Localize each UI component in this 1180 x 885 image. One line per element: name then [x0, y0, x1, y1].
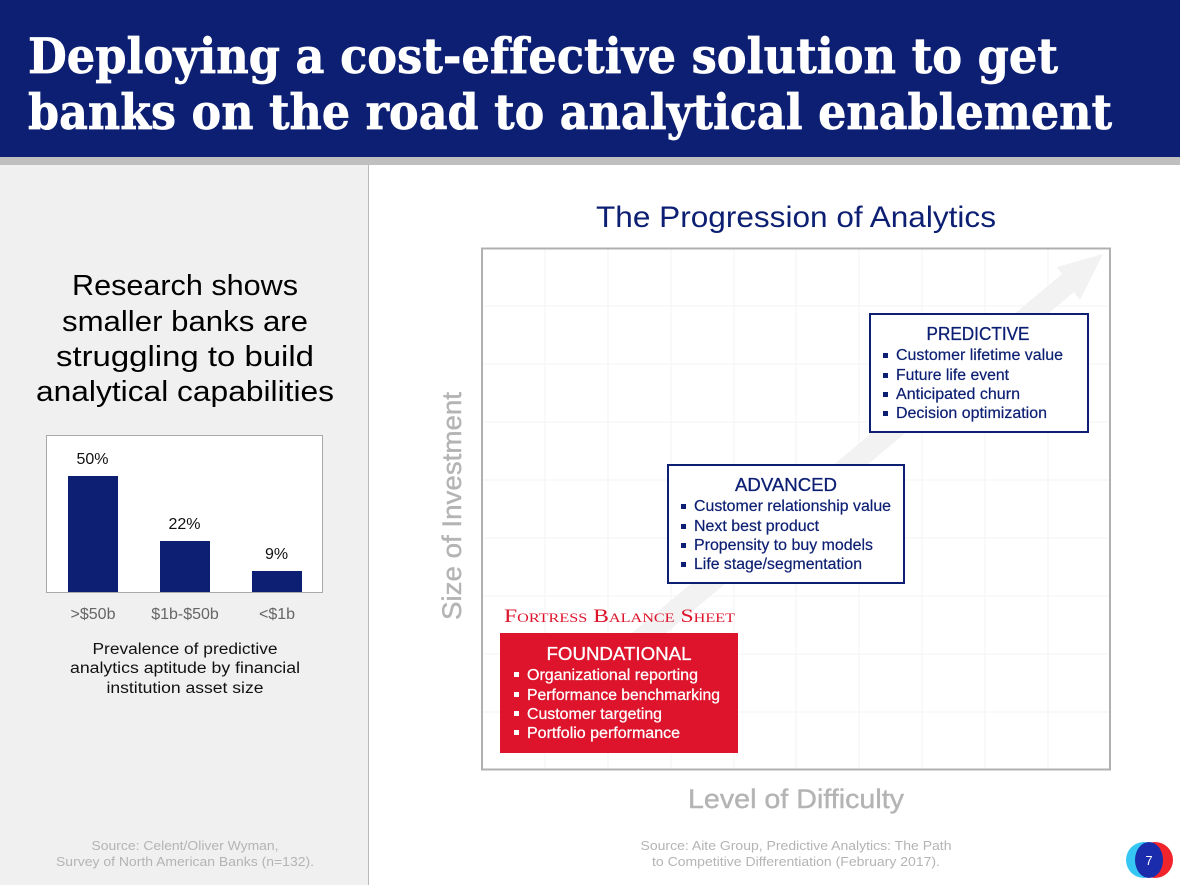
source: Celent: Survey of North American Banks (n=132).	[56, 855, 314, 869]
bar: <$1b 9%	[252, 546, 302, 623]
bar: >$50b 50%: >$50b	[71, 606, 116, 623]
source: Aite Group	[640, 839, 952, 869]
header banner	[0, 0, 1180, 165]
box: predictive: Future life event	[896, 367, 1010, 384]
label: fortress balance sheet: Fortress Balance Sheet	[504, 606, 735, 627]
box: foundational: Organizational reporting	[527, 667, 698, 684]
bar: $1b-$50b 22%	[151, 516, 219, 623]
bar: $1b-$50b 22%: 22%	[168, 516, 201, 533]
box: foundational: Portfolio performance	[527, 725, 680, 742]
chart caption: Prevalence of predictive	[92, 641, 278, 658]
source: Celent	[56, 839, 314, 869]
panel: research	[0, 165, 369, 885]
box: predictive: Anticipated churn	[896, 386, 1020, 403]
page number badge	[1126, 842, 1173, 878]
source: Celent: Source: Celent/Oliver Wyman,	[92, 839, 278, 853]
bar: >$50b 50%	[68, 451, 118, 623]
x axis label: Level of Difficulty	[688, 784, 905, 814]
box: foundational	[500, 633, 738, 753]
box: advanced: Life stage/segmentation	[694, 556, 862, 573]
chart caption	[70, 641, 300, 697]
research heading: analytical capabilities	[36, 376, 334, 408]
bar: <$1b 9%: <$1b	[259, 606, 295, 623]
bar: >$50b 50%: 50%	[76, 451, 109, 468]
research heading	[36, 270, 334, 408]
box: predictive: PREDICTIVE	[926, 324, 1030, 344]
box: foundational: FOUNDATIONAL	[546, 644, 692, 664]
box: predictive: Customer lifetime value	[896, 347, 1063, 364]
page number badge: 7	[1145, 853, 1153, 868]
box: predictive: Decision optimization	[896, 405, 1047, 422]
chart heading: The Progression of Analytics	[596, 201, 996, 234]
title	[28, 27, 1112, 141]
box: foundational: Customer targeting	[527, 706, 662, 723]
research heading: smaller banks are	[62, 306, 308, 338]
bar: <$1b 9%: 9%	[265, 546, 288, 563]
bar: $1b-$50b 22%: $1b-$50b	[151, 606, 219, 623]
box: advanced: Next best product	[694, 518, 820, 535]
research heading: Research shows	[72, 270, 298, 302]
title: Deploying a cost-effective solution to get	[28, 27, 1058, 85]
panel: progression matrix	[482, 248, 1110, 770]
arrow	[626, 254, 1103, 655]
box: predictive	[870, 314, 1088, 432]
chart caption: analytics aptitude by financial	[70, 660, 300, 677]
box: advanced: Customer relationship value	[694, 498, 891, 515]
box: advanced: Propensity to buy models	[694, 537, 873, 554]
source: Aite Group: Source: Aite Group, Predictive Analytics: The Path	[640, 839, 952, 853]
bar chart	[46, 436, 322, 623]
box: advanced: ADVANCED	[735, 475, 837, 495]
chart caption: institution asset size	[106, 680, 264, 697]
box: advanced	[668, 465, 904, 583]
box: foundational: Performance benchmarking	[527, 687, 720, 704]
research heading: struggling to build	[56, 341, 314, 373]
source: Aite Group: to Competitive Differentiation (February 2017).	[652, 855, 940, 869]
y axis label: Size of Investment	[437, 391, 467, 620]
